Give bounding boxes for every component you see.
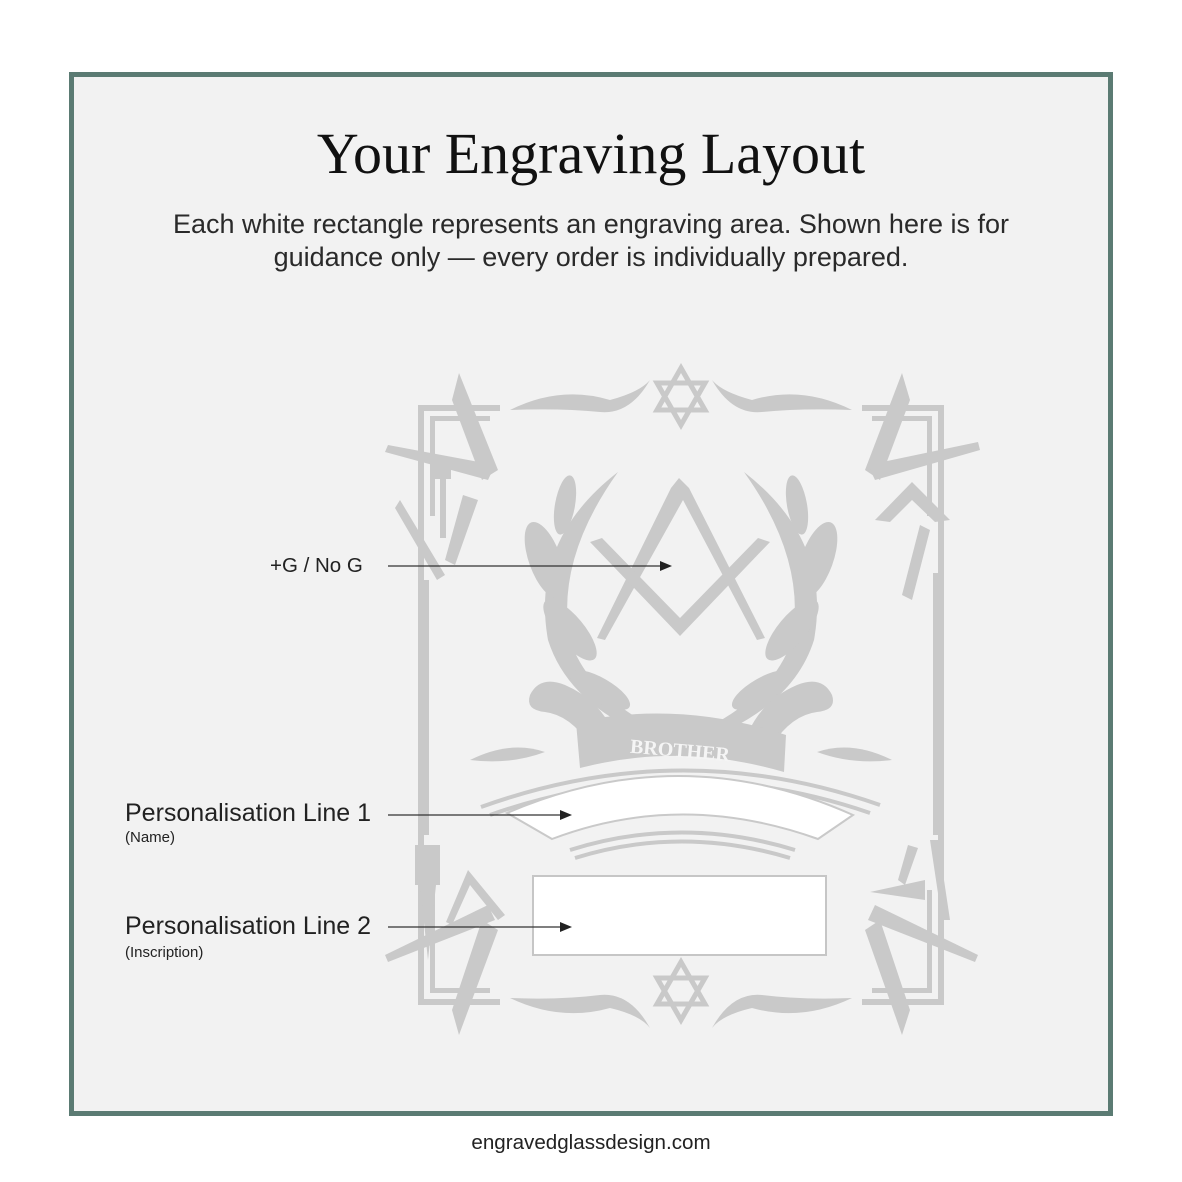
- subtitle: guidance only — every order is individually prepared.: [274, 242, 908, 272]
- footer url: engravedglassdesign.com: [471, 1131, 711, 1154]
- arrows: [388, 561, 672, 932]
- label: +G / No G: +G / No G: [270, 554, 363, 577]
- wreath: [516, 472, 846, 744]
- title: Your Engraving Layout: [317, 121, 865, 186]
- top ornament: [510, 368, 852, 1028]
- scrolls: [529, 682, 833, 745]
- frame panel: [69, 72, 1113, 1116]
- subtitle: [173, 209, 1009, 272]
- label: Personalisation Line 2: (Inscription): [125, 944, 203, 961]
- corner tools: [385, 373, 980, 1035]
- subtitle: Each white rectangle represents an engraving area. Shown here is for: [173, 209, 1009, 239]
- label: Personalisation Line 1: (Name): [125, 829, 175, 846]
- side sprigs: [470, 748, 892, 761]
- engraving area: inscription box: [533, 876, 826, 955]
- label: Personalisation Line 1: Personalisation Line 1: [125, 799, 371, 827]
- square and compass: [590, 478, 770, 640]
- label: Personalisation Line 1: [125, 799, 371, 846]
- outer frame lines: [418, 405, 944, 1005]
- label: Personalisation Line 2: [125, 912, 371, 961]
- label: Personalisation Line 2: Personalisation Line 2: [125, 912, 371, 940]
- engraving area: name band: [507, 776, 853, 839]
- arcs: [481, 770, 880, 858]
- banner: BROTHER: BROTHER: [629, 736, 731, 766]
- banner: BROTHER: [576, 714, 786, 772]
